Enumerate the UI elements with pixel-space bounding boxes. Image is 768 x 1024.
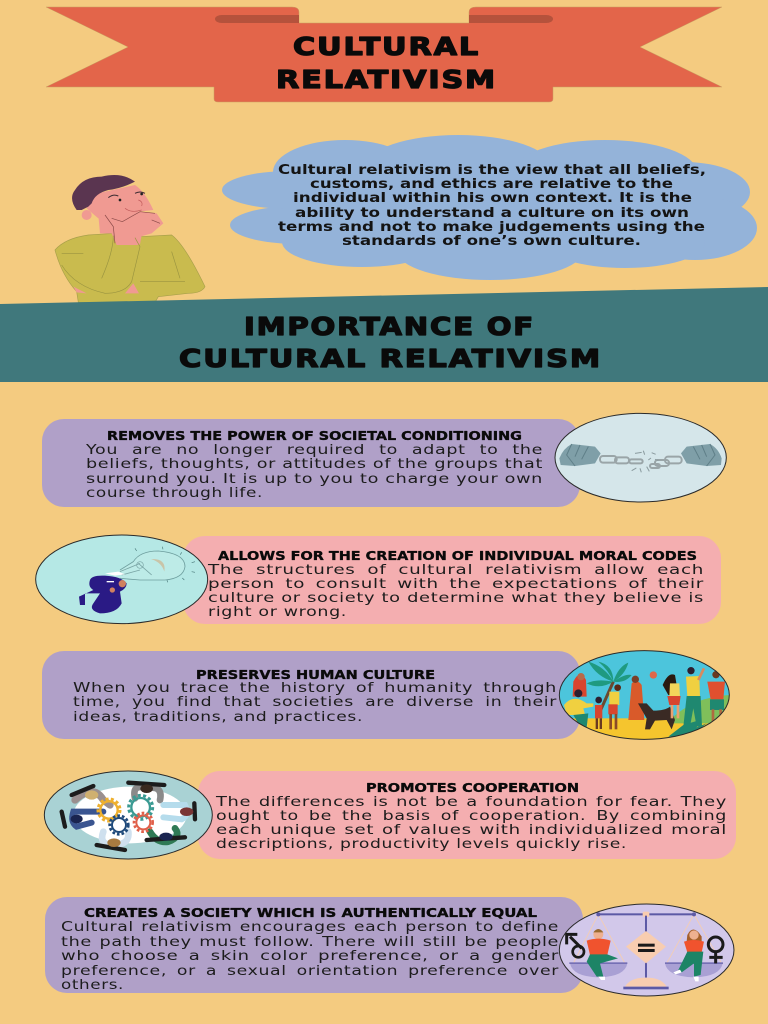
panel 3 heading: PRESERVES HUMAN CULTURE: [196, 668, 435, 682]
cloud text: ability to understand a culture on its own: [295, 205, 689, 221]
panel 2 body: [207, 562, 704, 620]
panel 3 body: When you trace the history of humanity through: [73, 680, 557, 696]
panel 5 body: who choose a skin color preference, or a gender: [61, 948, 559, 964]
title banner: [46, 7, 722, 102]
section heading: [179, 312, 602, 373]
panel 3 body: [73, 680, 557, 725]
panel 5 body: Cultural relativism encourages each person to define: [61, 919, 559, 935]
panel: removes the power of societal conditioning: [42, 413, 726, 507]
icon: broken chain: [555, 413, 726, 502]
panel: preserves human culture: [42, 651, 737, 742]
cloud text: individual within his own context. It is the: [293, 190, 692, 206]
panel: creates an authentically equal society: [45, 897, 734, 996]
icon: people on beach: [550, 651, 737, 742]
cloud text: standards of one’s own culture.: [342, 233, 641, 249]
cloud: definition: [222, 135, 757, 280]
section heading: IMPORTANCE OF: [244, 312, 535, 341]
panel: allows for individual moral codes: [36, 535, 721, 624]
illustration: thinking man: [55, 175, 205, 302]
cloud text: terms and not to make judgements using the: [278, 219, 705, 235]
panel 2 body: The structures of cultural relativism allow each: [207, 562, 704, 578]
panel 1 heading: REMOVES THE POWER OF SOCIETAL CONDITIONING: [107, 429, 522, 443]
icon: balance scale with gender symbols: [559, 904, 734, 996]
panel: promotes cooperation: [44, 771, 736, 859]
title text: [276, 32, 497, 94]
panel 3 body: ideas, traditions, and practices.: [73, 709, 363, 725]
panel 4 heading: PROMOTES COOPERATION: [366, 781, 579, 795]
panel 1 body: beliefs, thoughts, or attitudes of the groups that: [86, 456, 543, 472]
panel 4 body: ought to be the basis of cooperation. By combining: [216, 808, 727, 824]
panel 2 heading: ALLOWS FOR THE CREATION OF INDIVIDUAL MORAL CODES: [218, 549, 697, 563]
cloud text: [278, 162, 706, 249]
teal section band: [0, 287, 768, 382]
panel 2 body: right or wrong.: [208, 604, 347, 620]
panel 4 body: each unique set of values with individualized moral: [216, 822, 727, 838]
panel 1 body: [85, 442, 543, 501]
panel 4 body: [215, 794, 727, 852]
panel 4 body: descriptions, productivity levels quickly rise.: [216, 836, 627, 852]
icon: light bulb and thinker: [36, 535, 208, 624]
section heading: CULTURAL RELATIVISM: [179, 344, 602, 373]
title text: CULTURAL: [293, 32, 480, 61]
panel 1 body: course through life.: [86, 485, 263, 501]
panel 5 body: preference, or a sexual orientation preference over: [61, 963, 559, 979]
panel 5 heading: CREATES A SOCIETY WHICH IS AUTHENTICALLY EQUAL: [84, 906, 537, 920]
panel 5 body: [61, 919, 559, 993]
title text: RELATIVISM: [276, 65, 497, 94]
panel 5 body: others.: [61, 977, 124, 993]
panel 1 body: You are no longer required to adapt to the: [85, 442, 543, 458]
panel 1 body: surround you. It is up to you to charge your own: [86, 471, 543, 487]
panel 3 body: time, you find that societies are diverse in their: [73, 694, 557, 710]
cloud text: Cultural relativism is the view that all beliefs,: [278, 162, 706, 178]
icon: team around gears: [44, 771, 212, 859]
cloud text: customs, and ethics are relative to the: [310, 176, 673, 192]
panel 5 body: the path they must follow. There will still be people: [61, 934, 559, 950]
panel 4 body: The differences is not be a foundation for fear. They: [215, 794, 727, 810]
panel 2 body: culture or society to determine what they believe is: [208, 590, 704, 606]
panel 2 body: person to consult with the expectations of their: [208, 576, 704, 592]
